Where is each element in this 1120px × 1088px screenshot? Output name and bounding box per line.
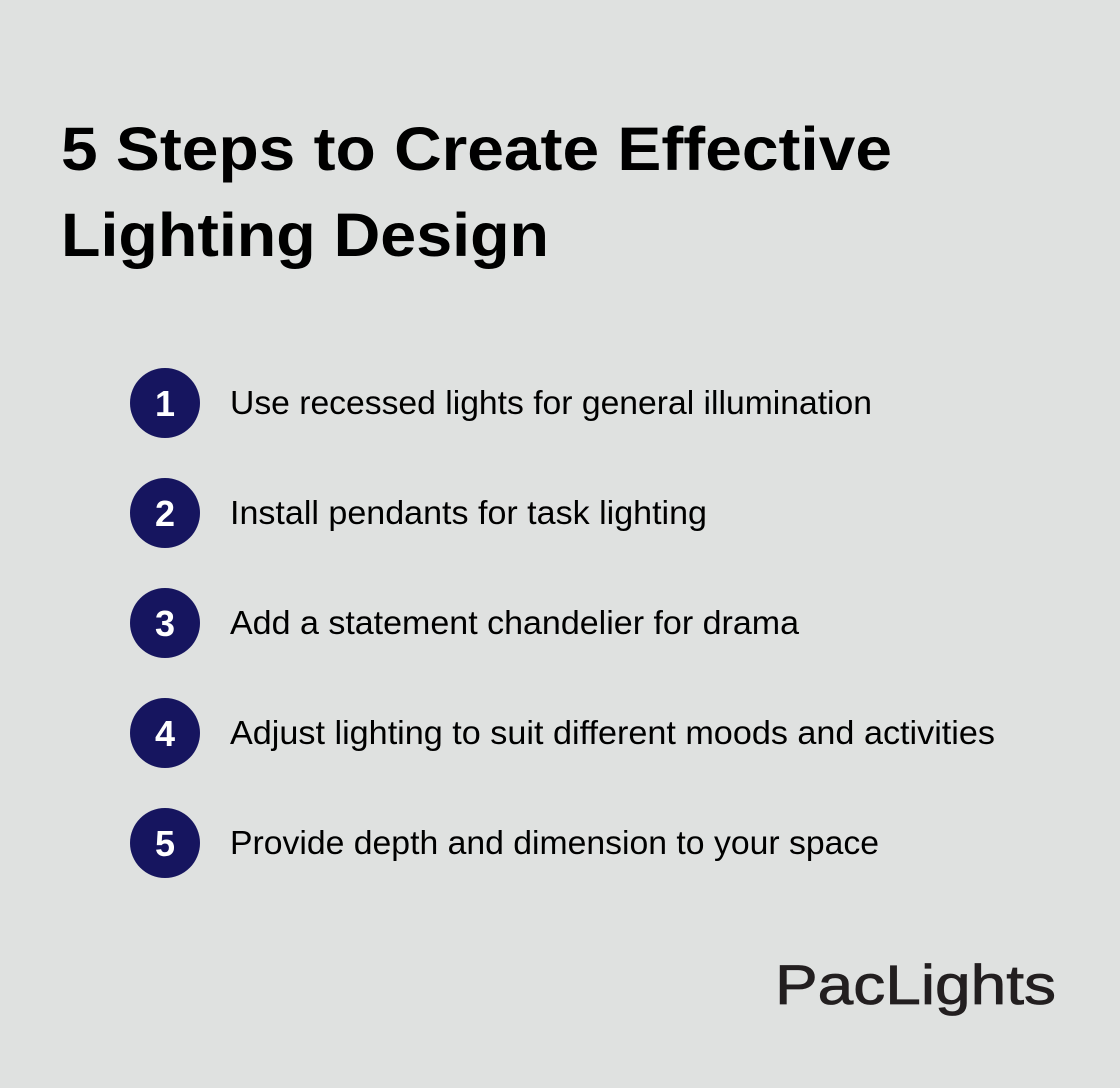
step 4: Adjust lighting to suit different moods and activities: [230, 714, 995, 751]
step 2: 2: [155, 493, 175, 534]
step 1: Use recessed lights for general illumination: [230, 384, 872, 421]
title: [61, 115, 892, 269]
step 1: 1: [155, 383, 175, 424]
step 5: 5: [155, 823, 175, 864]
step 4: [130, 698, 995, 768]
step 3: 3: [155, 603, 175, 644]
steps list: [130, 368, 995, 878]
step 2: [130, 478, 707, 548]
step 5: Provide depth and dimension to your space: [230, 824, 879, 861]
logo: PacLights: PacLights: [775, 953, 1056, 1016]
step 4: 4: [155, 713, 175, 754]
title: Lighting Design: [61, 201, 549, 269]
step 3: [130, 588, 800, 658]
step 3: Add a statement chandelier for drama: [230, 604, 800, 641]
title: 5 Steps to Create Effective: [61, 115, 892, 183]
step 1: [130, 368, 872, 438]
step 5: [130, 808, 879, 878]
step 2: Install pendants for task lighting: [230, 494, 707, 531]
